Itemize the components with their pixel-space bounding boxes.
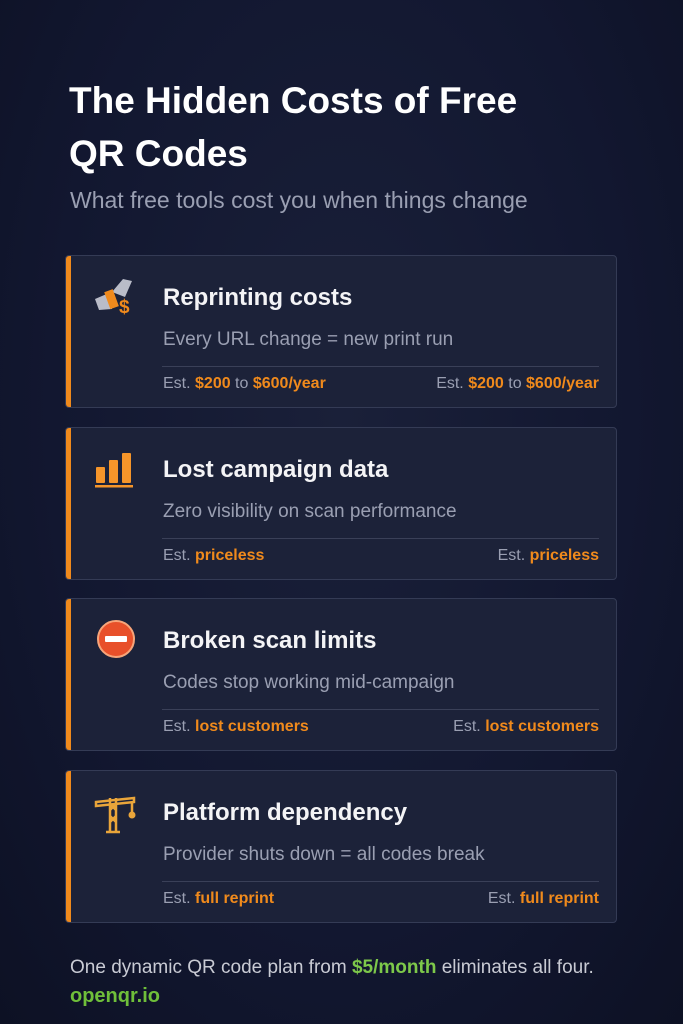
icon: crane — [94, 796, 136, 834]
icon: bar chart — [95, 453, 133, 488]
brand link: openqr.io — [70, 985, 160, 1007]
estimate right: Est. priceless — [498, 547, 599, 564]
description: Zero visibility on scan performance — [163, 501, 457, 522]
estimate: Est. full reprint — [163, 890, 274, 907]
estimate: Est. $200 to $600/year — [163, 375, 326, 392]
estimate: Est. lost customers — [163, 718, 309, 735]
title: QR Codes — [69, 133, 248, 174]
subtitle: What free tools cost you when things change — [70, 187, 528, 213]
panel: broken scan limits — [65, 598, 617, 751]
card title: Broken scan limits — [163, 627, 376, 654]
title — [69, 80, 517, 174]
panel: lost campaign data — [65, 427, 617, 580]
panel: reprinting costs — [65, 255, 617, 408]
estimate right: Est. $200 to $600/year — [436, 375, 599, 392]
description: Every URL change = new print run — [163, 329, 453, 350]
icon: flying money: $ — [119, 297, 130, 318]
title: The Hidden Costs of Free — [69, 80, 517, 121]
icon: flying money — [95, 279, 132, 318]
estimate right: Est. full reprint — [488, 890, 599, 907]
panel: platform dependency — [65, 770, 617, 923]
card title: Lost campaign data — [163, 456, 388, 483]
card title: Reprinting costs — [163, 284, 352, 311]
estimate: Est. priceless — [163, 547, 264, 564]
icon: no entry — [97, 620, 135, 658]
estimate right: Est. lost customers — [453, 718, 599, 735]
card title: Platform dependency — [163, 799, 407, 826]
description: Provider shuts down = all codes break — [163, 844, 485, 865]
footer text: One dynamic QR code plan from $5/month eliminates all four. — [70, 957, 594, 978]
description: Codes stop working mid-campaign — [163, 672, 454, 693]
